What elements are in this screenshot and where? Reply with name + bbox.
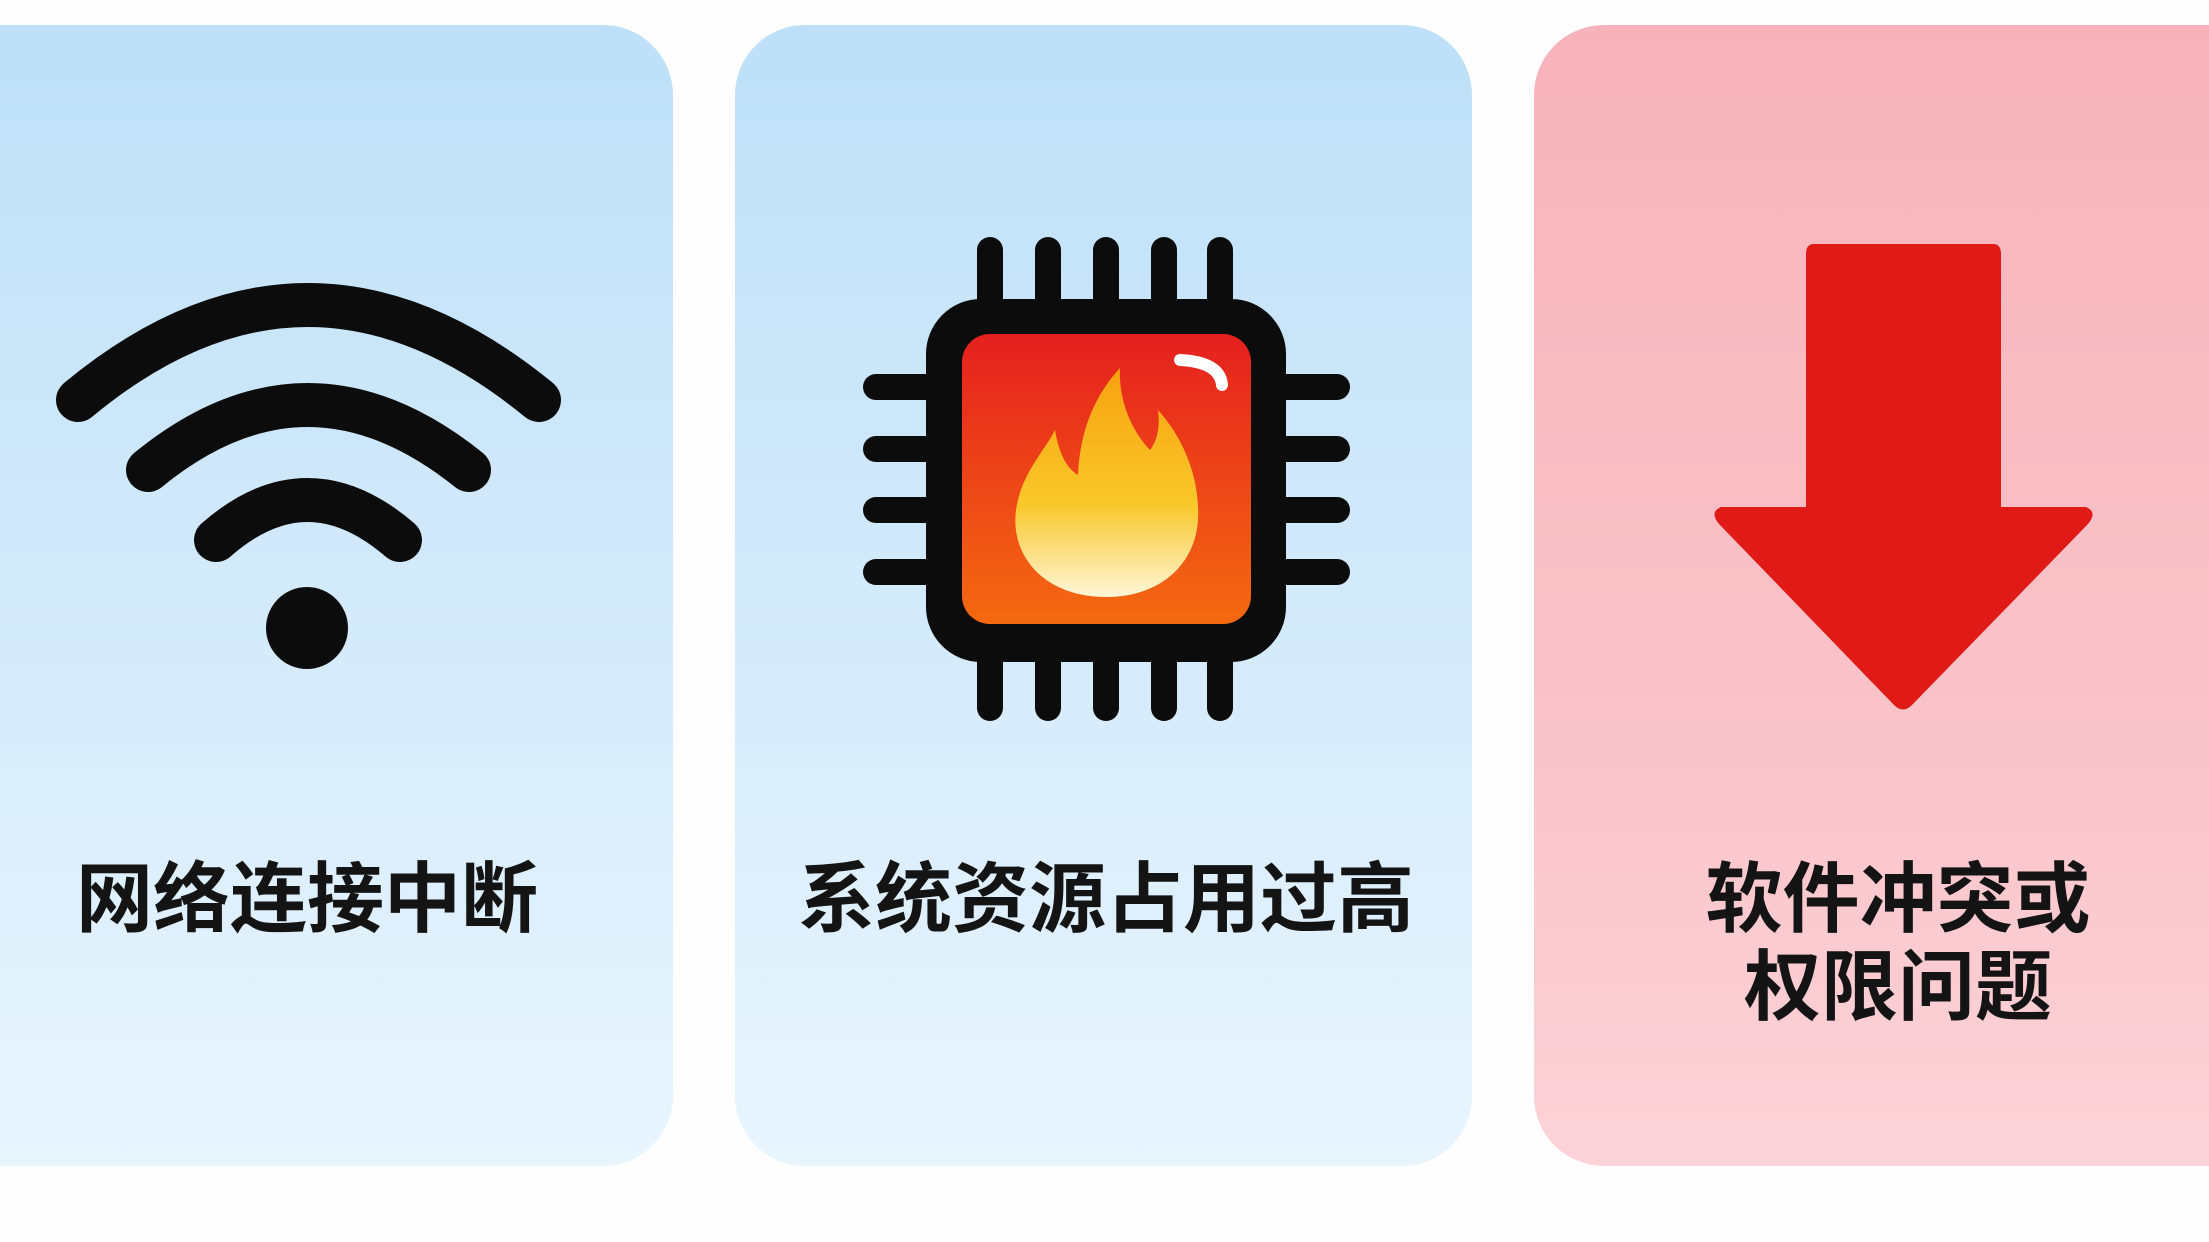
text: software conflict label <box>1706 838 2090 1037</box>
panel: network disconnect <box>0 25 673 1166</box>
text: software conflict label: 软件冲突或 <box>1706 838 2090 949</box>
panel: software conflict <box>1534 25 2209 1166</box>
icon: down arrow <box>1714 244 2092 710</box>
text: network label: 网络连接中断 <box>76 838 538 949</box>
text: software conflict label: 权限问题 <box>1744 926 2052 1037</box>
icon: wifi <box>56 283 561 669</box>
icon: hot chip <box>863 237 1350 721</box>
text: system resources label: 系统资源占用过高 <box>798 838 1414 949</box>
panel: system resources <box>735 25 1472 1166</box>
